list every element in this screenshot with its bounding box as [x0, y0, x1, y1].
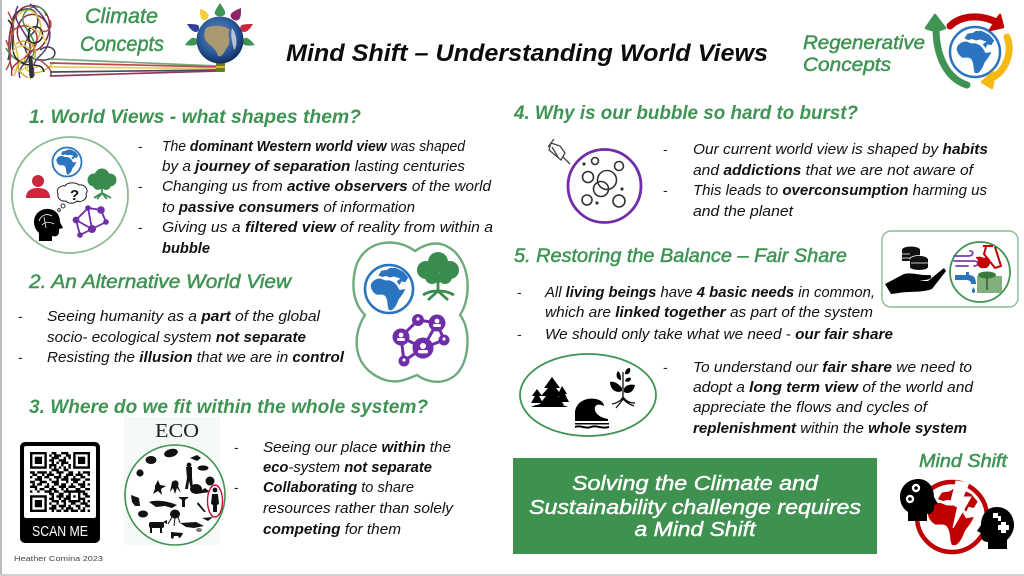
text block: section 2 bullets	[18, 308, 345, 366]
heading: mind shift: Mind Shift	[919, 451, 1008, 471]
text block: section 4 bullets: and the planet	[693, 204, 794, 220]
icon: ECO circle of animals and human	[124, 417, 225, 545]
text block: section 1 bullets: Changing us from active observers of the world	[162, 179, 492, 195]
panel: section 1 world views	[12, 107, 493, 257]
icon: clover of globe, tree and people network	[353, 243, 468, 382]
logo heading: Regenerative Concepts	[803, 33, 925, 76]
text block: section 1 bullets: The dominant Western world view was shaped	[162, 139, 466, 155]
panel: section 4 bubble	[513, 103, 988, 222]
text block: long term view bullet: adopt a long term view of the world and	[693, 380, 974, 396]
text block: long term view bullet: replenishment within the whole system	[693, 421, 967, 437]
callout: solving the climate challenge: a Mind Shift	[634, 519, 757, 541]
text block: section 1 bullets: to passive consumers of information	[162, 200, 415, 216]
text block: section 1 bullets: by a journey of separation lasting centuries	[162, 159, 465, 175]
text block: section 4 bullets: This leads to overconsumption harming us	[693, 183, 987, 199]
callout: solving the climate challenge: Solving the Climate and	[572, 473, 819, 495]
text block: long term view bullet: To understand our fair share we need to	[693, 360, 972, 376]
text block: section 2 bullets: Resisting the illusion that we are in control	[47, 350, 345, 366]
panel: section 5 fair share	[514, 231, 1018, 437]
text block: section 5 bullets: which are linked together as part of the system	[545, 305, 873, 321]
logo: climate concepts ribbon	[50, 59, 225, 76]
text block: section 3 bullets: eco-system not separate	[263, 460, 432, 476]
text block: section 5 bullets: -	[517, 326, 522, 342]
text block: section 1 bullets: -	[138, 138, 143, 154]
icon: mind shift red globe, heads and lightning	[900, 479, 1014, 552]
text block: long term view bullet: -	[663, 359, 668, 375]
credit: Heather Comina 2023	[14, 554, 103, 563]
logo heading: Climate Concepts	[80, 5, 164, 56]
text block: section 1 bullets	[138, 138, 493, 257]
icon: fair share hand and basic needs	[882, 231, 1018, 307]
text block: section 2 bullets: Seeing humanity as a part of the global	[47, 309, 321, 325]
icon: QR code scan me: SCAN ME	[32, 524, 88, 540]
panel: section 2 alternative world view	[18, 243, 468, 382]
icon: world view circle: ?	[70, 187, 79, 204]
text block: section 1 bullets: -	[138, 178, 143, 194]
logo: climate concepts tangled threads	[6, 4, 55, 78]
text block: section 5 bullets: -	[517, 284, 522, 300]
icon: pin and bubble	[548, 139, 641, 222]
callout: solving the climate challenge: Sustainability challenge requires	[529, 497, 861, 519]
text block: section 3 bullets: -	[234, 439, 239, 455]
text block: section 3 bullets: Collaborating to share	[263, 480, 414, 496]
text block: section 1 bullets: bubble	[162, 241, 210, 257]
icon: forest, wave and plant oval	[520, 354, 656, 436]
text block: section 5 bullets	[517, 284, 893, 343]
text block: section 4 bullets: Our current world view is shaped by habits	[693, 142, 988, 158]
heading: section 3: 3. Where do we fit within the whole system?	[29, 397, 428, 418]
icon: earth with petals	[185, 3, 255, 64]
text block: section 2 bullets: -	[18, 349, 23, 365]
icon: QR code scan me	[20, 442, 100, 543]
title: Mind Shift – Understanding World Views	[286, 40, 768, 67]
text block: section 4 bullets: -	[663, 182, 668, 198]
text block: long term view bullet: appreciate the flows and cycles of	[693, 400, 929, 416]
text block: section 5 bullets: All living beings have 4 basic needs in common,	[544, 285, 875, 301]
heading: section 2: 2. An Alternative World View	[28, 272, 292, 293]
icon: ECO circle of animals and human: ECO	[155, 420, 199, 442]
callout: solving the climate challenge	[513, 458, 877, 554]
text block: section 5 bullets: We should only take what we need - our fair share	[545, 327, 893, 343]
text block: section 1 bullets: -	[138, 219, 143, 235]
logo heading: Regenerative Concepts: Regenerative	[803, 33, 925, 54]
text block: section 4 bullets	[663, 141, 988, 220]
heading: section 4: 4. Why is our bubble so hard to burst?	[513, 103, 858, 124]
text block: section 3 bullets: competing for them	[263, 522, 401, 538]
panel: section 3 whole system	[20, 397, 454, 545]
icon: regenerative cycle arrows around globe	[926, 15, 1009, 88]
heading: section 5: 5. Restoring the Balance – Fair Share	[514, 246, 847, 267]
text block: section 3 bullets	[234, 439, 454, 538]
text block: section 1 bullets: Giving us a filtered view of reality from within a	[162, 220, 493, 236]
icon: world view circle	[12, 137, 128, 253]
logo heading: Regenerative Concepts: Concepts	[803, 55, 892, 76]
text block: section 4 bullets: and addictions that we are not aware of	[693, 163, 975, 179]
heading: section 1: 1. World Views - what shapes them?	[29, 107, 361, 128]
text block: section 2 bullets: -	[18, 308, 23, 324]
text block: section 3 bullets: -	[234, 479, 239, 495]
logo heading: Climate Concepts: Concepts	[80, 33, 164, 56]
text block: section 2 bullets: socio- ecological system not separate	[47, 330, 306, 346]
text block: section 4 bullets: -	[663, 141, 668, 157]
text block: section 3 bullets: Seeing our place within the	[263, 440, 451, 456]
text block: long term view bullet	[663, 359, 974, 437]
text block: section 3 bullets: resources rather than solely	[263, 501, 454, 517]
logo heading: Climate Concepts: Climate	[85, 5, 158, 28]
